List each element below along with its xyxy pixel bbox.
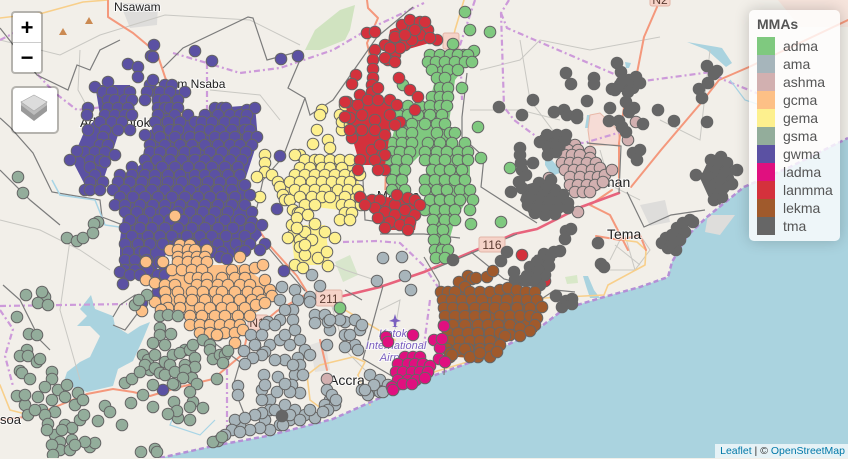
legend: ladma (783, 164, 821, 180)
place labels: Madina (377, 188, 420, 203)
legend: lekma (783, 200, 820, 216)
road shields: 211 (319, 292, 339, 306)
minor roads (0, 15, 710, 380)
sea (160, 138, 848, 458)
river (52, 80, 775, 435)
place labels: Nsawam (114, 0, 161, 14)
peak markers (0, 0, 93, 35)
markers: gema (251, 99, 367, 274)
markers: lekma (435, 265, 548, 363)
attribution: Leaflet | © OpenStreetMap (720, 445, 845, 457)
markers: ama (219, 251, 417, 441)
legend (749, 10, 840, 241)
legend: gwma (783, 146, 820, 162)
markers: tma (447, 57, 743, 313)
layers control (11, 86, 59, 134)
zoom control: − (21, 45, 33, 70)
place labels (0, 0, 641, 427)
place labels: Tema (607, 226, 641, 242)
road shields: 116 (482, 238, 502, 252)
legend: MMAs (757, 16, 798, 32)
road shields (248, 0, 670, 330)
markers: ladma (380, 320, 451, 396)
markers: adma (334, 6, 516, 314)
legend: lanmma (783, 182, 833, 198)
icon: airport (389, 314, 401, 327)
district borders (0, 7, 705, 429)
legend: gsma (783, 128, 817, 144)
markers: gsma (11, 171, 234, 459)
legend: gema (783, 110, 818, 126)
markers: lanmma (339, 14, 551, 287)
markers: ashma (321, 116, 642, 385)
place labels: Kotoka (379, 328, 413, 340)
coast boundary (160, 138, 848, 458)
place labels: soa (0, 412, 22, 427)
legend: ashma (783, 74, 825, 90)
place labels: Airport (379, 352, 413, 364)
place labels: International (366, 340, 427, 352)
legend: gcma (783, 92, 817, 108)
marker: lone tma (276, 410, 288, 422)
markers: gcma (136, 210, 278, 349)
zoom control (11, 11, 43, 74)
yellow roads (0, 0, 646, 416)
place labels: Adjen Kotoku (80, 115, 157, 130)
lakes and water (63, 42, 732, 392)
motorway (343, 193, 619, 296)
legend: tma (783, 218, 806, 234)
parks and land use (120, 0, 848, 372)
zoom control: + (21, 15, 33, 40)
markers: gwma (64, 39, 304, 396)
place labels: Ashaiman (568, 174, 630, 190)
road shields: N1 (249, 316, 265, 330)
marker: lone adma (334, 302, 346, 314)
place labels: Accra (329, 372, 365, 388)
legend: adma (783, 38, 818, 54)
place labels: Pokrom Nsaba (146, 77, 226, 91)
legend: ama (783, 56, 810, 72)
